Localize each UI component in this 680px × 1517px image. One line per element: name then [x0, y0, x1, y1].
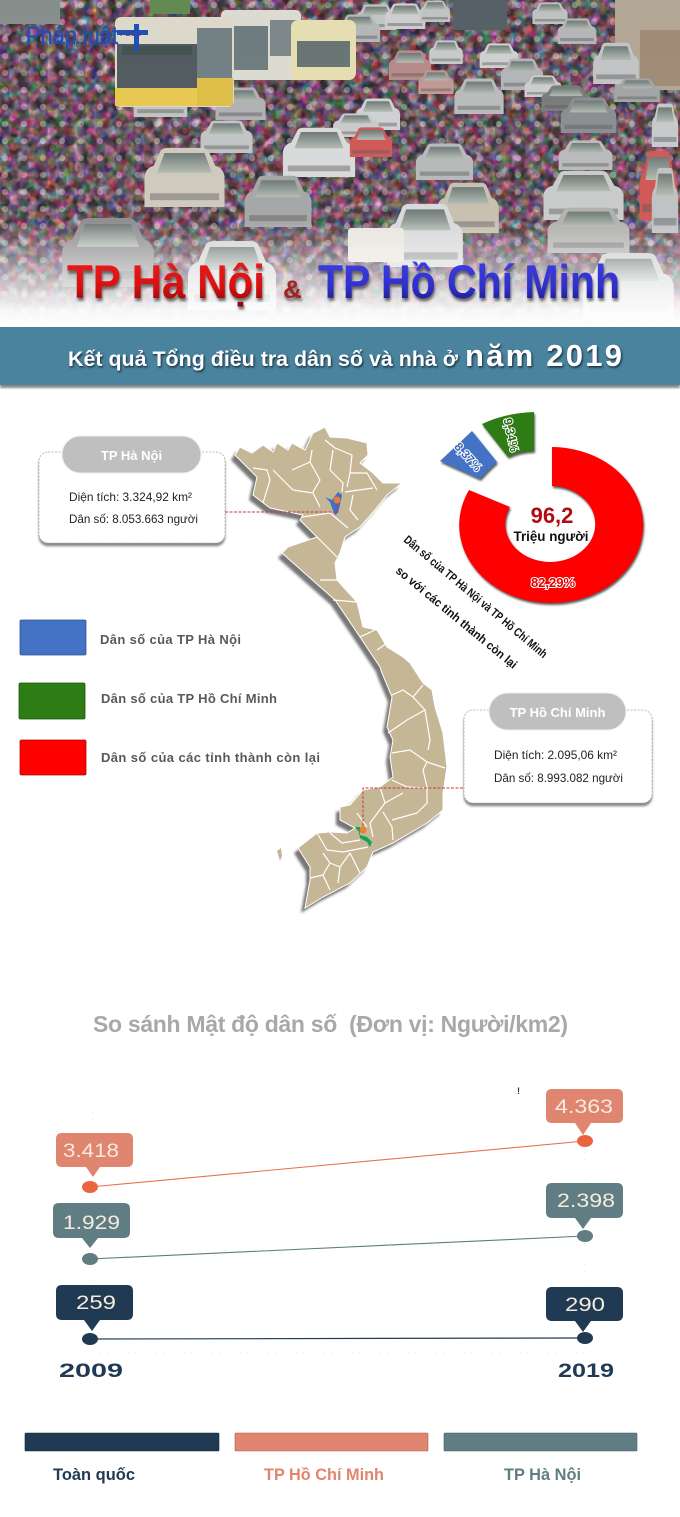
rotated caption for donut: so với các tỉnh thành còn lại — [393, 564, 520, 672]
series: TP Hà Nội: 1.929 — [63, 1213, 120, 1234]
legend: density series: Toàn quốc — [53, 1465, 135, 1484]
legend: density series: TP Hà Nội — [504, 1465, 581, 1484]
axis label: 2009: 2009 — [59, 1361, 123, 1382]
callout: TP Hồ Chí Minh: Dân số: 8.993.082 người — [494, 771, 623, 785]
highlight: Hà Nội on map — [325, 492, 342, 515]
callout: TP Hồ Chí Minh — [464, 693, 652, 803]
legend: density series: TP Hồ Chí Minh — [264, 1465, 384, 1484]
connector: Hà Nội — [225, 500, 337, 512]
callout: TP Hà Nội: TP Hà Nội — [101, 448, 162, 463]
series: TP Hồ Chí Minh — [56, 1089, 623, 1193]
label: 96,2: 96,2 — [531, 503, 573, 528]
connector: Hồ Chí Minh — [363, 788, 463, 830]
callout: TP Hà Nội — [39, 436, 225, 543]
segment: Hồ Chí Minh 9,34% — [482, 412, 534, 457]
series: TP Hà Nội: 2.398 — [557, 1191, 615, 1212]
axis label: 2019: 2019 — [558, 1361, 614, 1382]
highlight: Hồ Chí Minh on map — [355, 827, 372, 847]
series: TP Hồ Chí Minh: 3.418 — [63, 1141, 119, 1162]
series: Toàn quốc: 259 — [76, 1293, 116, 1314]
callout: TP Hồ Chí Minh: Diện tích: 2.095,06 km² — [494, 748, 617, 762]
rotated caption for donut: Dân số của TP Hà Nội và TP Hồ Chí Minh — [401, 533, 550, 661]
title: TP Hà Nội & TP Hồ Chí Minh: TP Hà Nội — [67, 255, 265, 308]
segment: others 82,29% — [459, 447, 643, 603]
logo: Pháp luật Plus: PLUS — [120, 29, 142, 38]
callout: TP Hồ Chí Minh: TP Hồ Chí Minh — [510, 705, 605, 720]
line chart: population density — [53, 1086, 623, 1382]
segment: Hà Nội 8,37% — [440, 431, 497, 479]
label: 82,29%: 82,29% — [531, 575, 575, 590]
map of Vietnam — [225, 427, 463, 913]
series: Toàn quốc: 290 — [565, 1295, 605, 1316]
label: Triệu người: Triệu người — [514, 528, 588, 544]
header photo: traffic jam — [0, 0, 680, 326]
marker: Hồ Chí Minh — [360, 826, 366, 834]
series: Toàn quốc — [56, 1285, 623, 1345]
legend: density series — [25, 1433, 637, 1484]
callout: TP Hà Nội: Diện tích: 3.324,92 km² — [69, 490, 192, 504]
donut chart: 96,2 million — [440, 412, 643, 603]
legend: population share: Dân số của TP Hồ Chí Minh — [101, 691, 277, 706]
label: 8,37%: 8,37% — [451, 440, 485, 475]
marker: Hà Nội — [334, 496, 340, 504]
title: TP Hà Nội & TP Hồ Chí Minh — [67, 255, 620, 308]
legend: population share: Dân số của các tỉnh thành còn lại — [101, 750, 320, 765]
series: TP Hồ Chí Minh: 4.363 — [555, 1097, 613, 1118]
banner: subtitle band — [0, 327, 680, 385]
label: 9,34%: 9,34% — [501, 417, 521, 453]
heading: density comparison: So sánh Mật độ dân số (Đơn vị: Người/km2) — [93, 1011, 568, 1037]
title: TP Hà Nội & TP Hồ Chí Minh: TP Hồ Chí Minh — [318, 255, 620, 308]
logo: Pháp luật Plus: Pháp luật — [26, 22, 118, 50]
banner: subtitle band: năm 2019 — [465, 338, 622, 373]
series: TP Hà Nội — [53, 1183, 623, 1265]
line chart: population density: ! — [517, 1086, 520, 1096]
rotated caption for donut — [393, 533, 550, 672]
title: TP Hà Nội & TP Hồ Chí Minh: & — [283, 276, 302, 304]
logo: Pháp luật Plus: VIỆT NAM — [70, 41, 98, 49]
legend: population share: Dân số của TP Hà Nội — [100, 632, 241, 647]
callout: TP Hà Nội: Dân số: 8.053.663 người — [69, 512, 198, 526]
banner: subtitle band: Kết quả Tổng điều tra dân số và nhà ở — [68, 348, 458, 371]
legend: population share — [19, 620, 320, 775]
